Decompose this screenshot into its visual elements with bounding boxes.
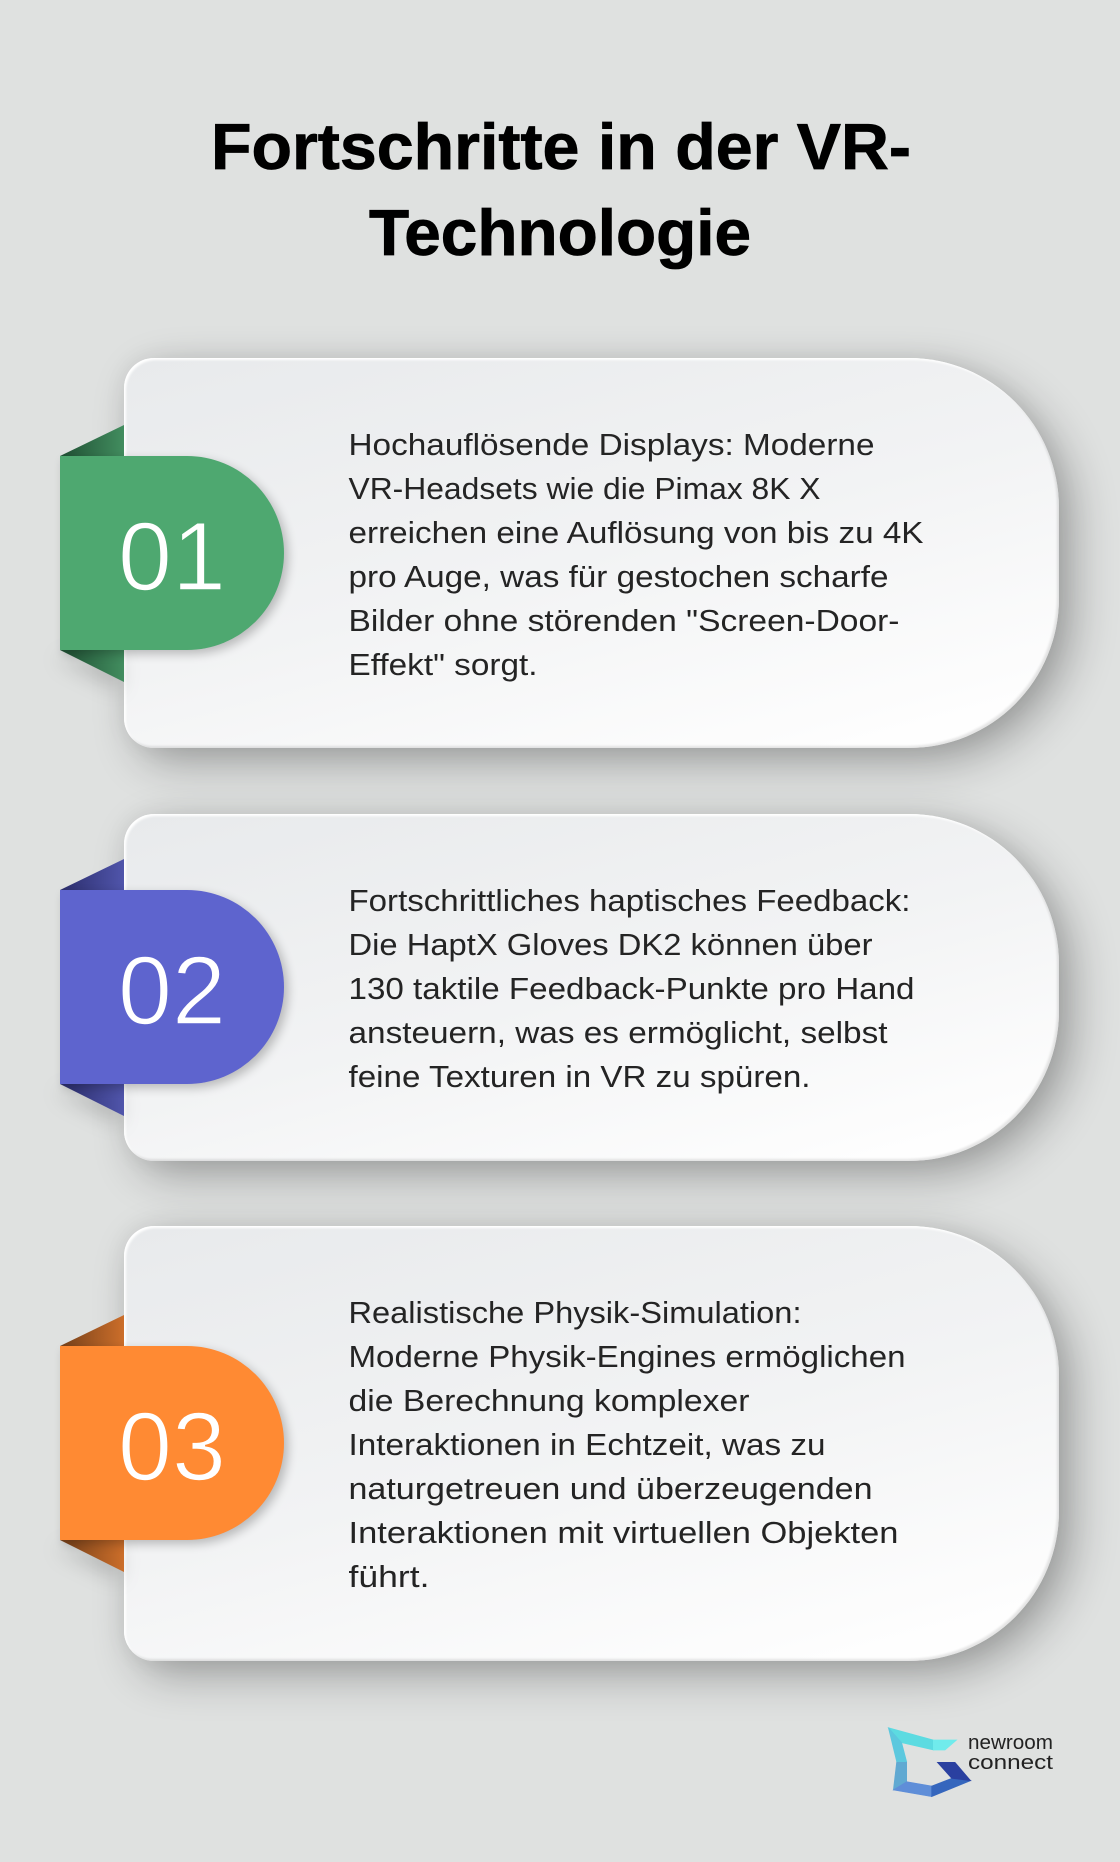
- title: [211, 110, 911, 270]
- number badge 02: [60, 890, 284, 1084]
- text block 01: [348, 427, 924, 682]
- number 03: 03: [118, 1392, 226, 1501]
- text block 02: [348, 883, 914, 1094]
- text block 01: pro Auge, was für gestochen scharfe: [348, 559, 888, 594]
- logo: newroom connect: [888, 1727, 1054, 1798]
- logo wordmark: connect: [968, 1752, 1054, 1774]
- logo wordmark: [968, 1732, 1054, 1774]
- logo wordmark: newroom: [968, 1732, 1053, 1754]
- ribbon folds 01: [60, 425, 127, 691]
- card background 02: [124, 814, 1059, 1161]
- title: Technologie: [369, 196, 751, 269]
- text block 01: VR-Headsets wie die Pimax 8K X: [348, 471, 821, 506]
- text block 03: [348, 1295, 906, 1594]
- ribbon folds 03: [60, 1315, 127, 1581]
- number badge 03: [60, 1346, 284, 1540]
- text block 02: feine Texturen in VR zu spüren.: [348, 1059, 810, 1094]
- panel: step 01: [58, 344, 1097, 786]
- text block 01: Bilder ohne störenden "Screen-Door-: [348, 603, 900, 638]
- text block 03: naturgetreuen und überzeugenden: [348, 1471, 872, 1506]
- text block 02: Die HaptX Gloves DK2 können über: [348, 927, 872, 962]
- text block 03: Realistische Physik-Simulation:: [348, 1295, 802, 1330]
- text block 03: Interaktionen in Echtzeit, was zu: [348, 1427, 825, 1462]
- icon: logo mark: [888, 1728, 971, 1797]
- text block 03: die Berechnung komplexer: [348, 1383, 750, 1418]
- panel: step 03: [58, 1214, 1097, 1699]
- text block 02: ansteuern, was es ermöglicht, selbst: [348, 1015, 888, 1050]
- text block 01: erreichen eine Auflösung von bis zu 4K: [348, 515, 924, 550]
- number 01: 01: [118, 502, 226, 611]
- panel: step 02: [58, 802, 1097, 1199]
- ribbon folds 02: [60, 859, 127, 1125]
- card background 03: [124, 1226, 1059, 1661]
- text block 03: führt.: [348, 1559, 430, 1594]
- text block 03: Moderne Physik-Engines ermöglichen: [348, 1339, 906, 1374]
- text block 02: 130 taktile Feedback-Punkte pro Hand: [348, 971, 914, 1006]
- text block 01: Effekt" sorgt.: [348, 647, 538, 682]
- text block 03: Interaktionen mit virtuellen Objekten: [348, 1515, 898, 1550]
- card background 01: [124, 358, 1059, 748]
- number badge 01: [60, 456, 284, 650]
- title: Fortschritte in der VR-: [211, 110, 911, 183]
- number 02: 02: [118, 936, 226, 1045]
- text block 01: Hochauflösende Displays: Moderne: [348, 427, 874, 462]
- text block 02: Fortschrittliches haptisches Feedback:: [348, 883, 910, 918]
